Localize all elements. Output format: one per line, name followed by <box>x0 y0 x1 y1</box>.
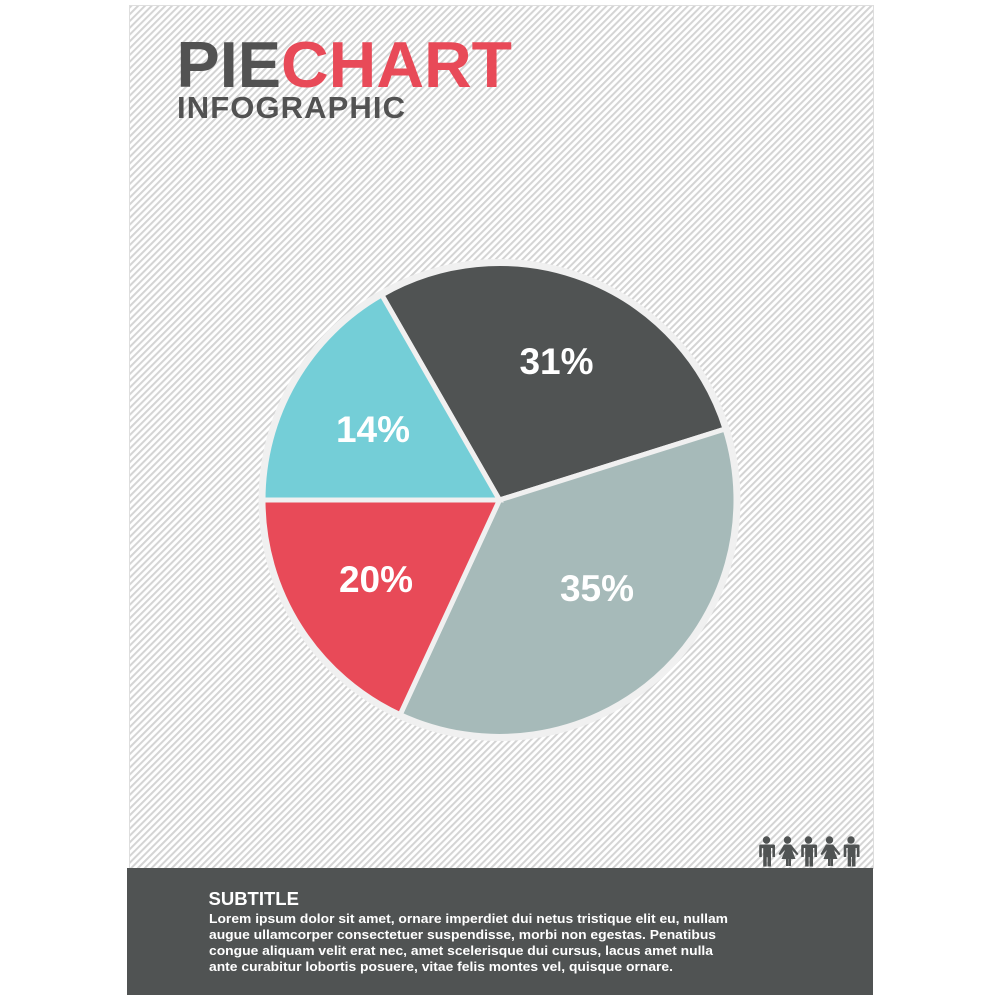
slice: 31% dark gray <box>382 264 725 500</box>
icon: row of people <box>759 836 860 866</box>
footer body text: congue aliquam velit erat nec, amet scelerisque dui cursus, lacus amet nulla <box>209 944 714 958</box>
label: 20%: 20% <box>339 559 413 600</box>
footer body text: ante curabitur lobortis posuere, vitae felis montes vel, quisque ornare. <box>209 960 673 974</box>
label: 35%: 35% <box>560 568 634 609</box>
pie chart <box>258 259 740 741</box>
icon: woman 1 <box>778 836 798 866</box>
footer background <box>127 868 873 995</box>
icon: man 2 <box>801 836 817 866</box>
slice: 20% red <box>263 500 500 715</box>
title <box>176 28 512 125</box>
footer body text: augue ullamcorper consectetuer suspendisse, morbi non egestas. Penatibus <box>209 928 716 942</box>
title word: CHART: CHART <box>281 28 512 101</box>
label: 31%: 31% <box>519 341 594 382</box>
icon: man 3 <box>844 836 860 866</box>
footer body text: Lorem ipsum dolor sit amet, ornare imperdiet dui netus tristique elit eu, nullam <box>209 912 728 926</box>
pie halo <box>258 259 740 741</box>
icon: man 1 <box>759 836 775 866</box>
footer heading: SUBTITLE <box>208 888 299 909</box>
label: 14%: 14% <box>336 409 410 450</box>
title word: PIE: PIE <box>176 28 281 101</box>
subtitle: INFOGRAPHIC: INFOGRAPHIC <box>177 90 405 125</box>
slice: 14% teal <box>263 295 500 500</box>
panel: footer <box>127 868 873 995</box>
icon: woman 2 <box>820 836 840 866</box>
footer body text <box>209 912 728 974</box>
panel: striped background <box>130 6 874 868</box>
slice: 35% gray-blue <box>400 429 736 736</box>
